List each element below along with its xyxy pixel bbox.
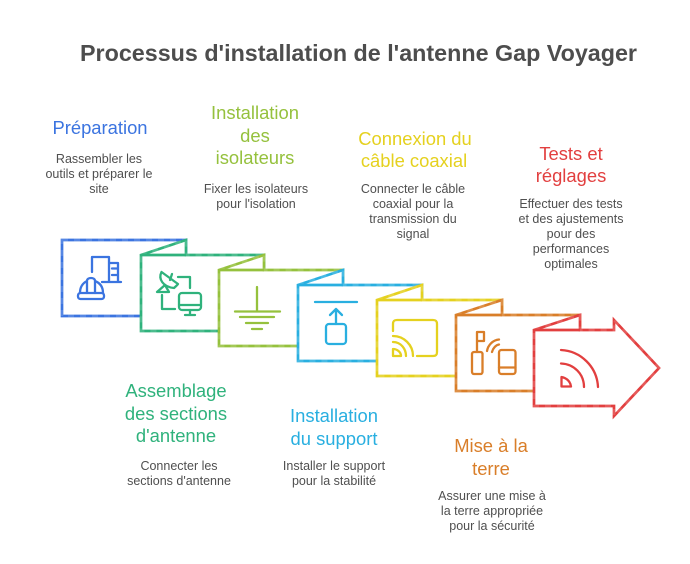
step 5 text: [358, 128, 472, 241]
icon: ground symbol: [235, 287, 280, 329]
step 6 text: Mise à la: [454, 435, 529, 456]
step 2 text: d'antenne: [136, 425, 216, 446]
step 5: yellow panel: [377, 285, 502, 376]
step 4 text: Installer le support: [283, 459, 386, 473]
step 4 text: Installation: [290, 405, 378, 426]
step 5 text: transmission du: [369, 212, 457, 226]
step 4: blue-cyan panel: [298, 270, 422, 361]
icon: buildings and hard hat: [78, 257, 121, 299]
step 2 text: [125, 380, 231, 488]
icon: wifi signal: [561, 350, 598, 387]
step 7 text: performances: [533, 242, 609, 256]
step 5 text: signal: [397, 227, 429, 241]
step 5 text: Connexion du: [358, 128, 472, 149]
step 6 text: terre: [472, 458, 510, 479]
step 2 text: Assemblage: [125, 380, 227, 401]
icon: antenna and device: [472, 332, 516, 374]
step 3 text: Fixer les isolateurs: [204, 182, 308, 196]
icon: satellite dish and monitor: [157, 272, 201, 315]
step 1 text: site: [89, 182, 109, 196]
step 1 text: [45, 117, 153, 196]
step 1 text: outils et préparer le: [45, 167, 153, 181]
step 7 text: Tests et: [539, 143, 603, 164]
step 3 text: isolateurs: [216, 147, 294, 168]
step 2: green panel: [141, 240, 264, 331]
step 4 text: pour la stabilité: [292, 474, 376, 488]
step 7 text: Effectuer des tests: [519, 197, 623, 211]
step 4 text: du support: [291, 428, 377, 449]
step 6 text: la terre appropriée: [441, 504, 543, 518]
step 3 text: pour l'isolation: [216, 197, 296, 211]
step 7 text: [519, 143, 623, 271]
step 3 text: Installation: [211, 102, 299, 123]
icon: support upload: [315, 302, 357, 344]
step 3: lime panel: [219, 255, 343, 346]
step 7 text: et des ajustements: [519, 212, 623, 226]
step 7 text: pour des: [547, 227, 595, 241]
step 7: red arrow: [534, 315, 659, 416]
step 6 text: [438, 435, 546, 533]
title: Processus d'installation de l'antenne Gap Voyager: [80, 40, 637, 66]
step 6 text: Assurer une mise à: [438, 489, 546, 503]
step 1 text: Rassembler les: [56, 152, 142, 166]
step 6 text: pour la sécurité: [449, 519, 535, 533]
step 5 text: coaxial pour la: [373, 197, 453, 211]
step 6: orange panel: [456, 300, 580, 391]
step 4 text: [283, 405, 386, 488]
icon: cast signal screen: [393, 320, 437, 356]
step 2 text: des sections: [125, 403, 227, 424]
step 2 text: sections d'antenne: [127, 474, 231, 488]
step 7 text: réglages: [536, 165, 606, 186]
step 5 text: câble coaxial: [361, 150, 467, 171]
step 5 text: Connecter le câble: [361, 182, 465, 196]
step 1 text: Préparation: [52, 117, 148, 138]
step 2 text: Connecter les: [140, 459, 218, 473]
step 7 text: optimales: [544, 257, 598, 271]
step 1: blue panel: [62, 240, 186, 316]
step 3 text: [204, 102, 308, 211]
step 3 text: des: [240, 125, 270, 146]
